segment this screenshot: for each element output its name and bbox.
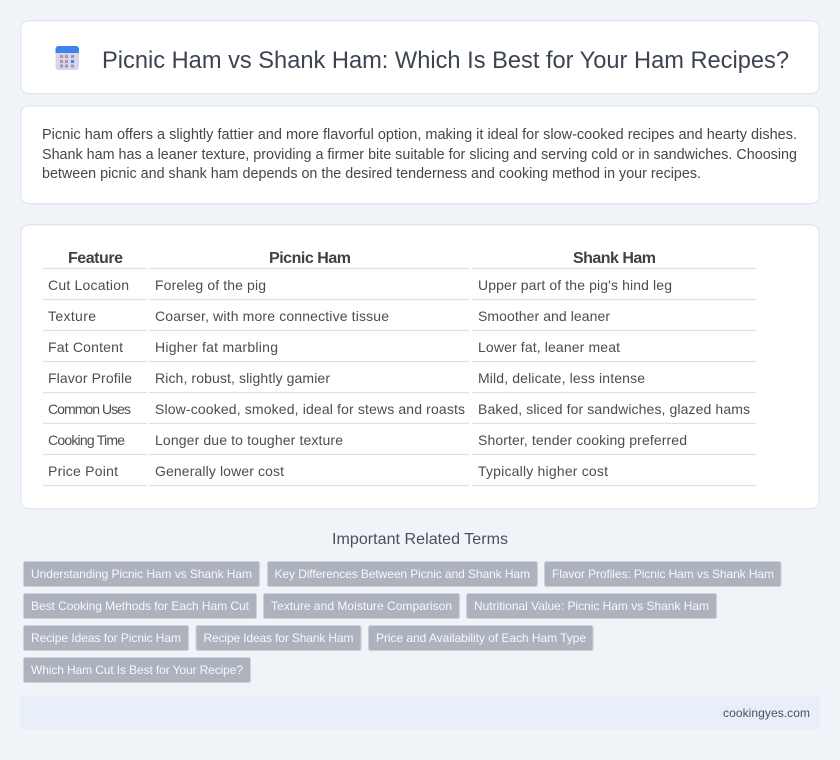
tag bbox=[24, 562, 260, 586]
text block: description: Shank ham has a leaner texture, providing a firmer bite suitable for slicing and serving cold or in sandwiches. Choosing bbox=[42, 147, 797, 163]
table header: Picnic Ham bbox=[269, 250, 351, 267]
row: price point bbox=[48, 463, 608, 479]
text block: description bbox=[42, 127, 797, 182]
table header: Feature bbox=[68, 250, 123, 267]
row: cooking time bbox=[48, 432, 687, 448]
row: cut location: Cut Location bbox=[48, 277, 129, 293]
text block: description: between picnic and shank ham depends on the desired tenderness and cooking method in your recipes. bbox=[42, 166, 701, 182]
tags: related terms bbox=[24, 562, 781, 682]
tag: Flavor Profiles: Picnic Ham vs Shank Ham bbox=[552, 567, 774, 581]
footer source: cookingyes.com bbox=[723, 706, 810, 720]
row: price point: Typically higher cost bbox=[478, 463, 608, 479]
text block: description: Picnic ham offers a slightly fattier and more flavorful option, making it ideal for slow-cooked recipes and hearty dishes. bbox=[42, 127, 797, 143]
tag: Which Ham Cut Is Best for Your Recipe? bbox=[31, 663, 243, 677]
tag: Recipe Ideas for Picnic Ham bbox=[31, 631, 181, 645]
row: fat content: Lower fat, leaner meat bbox=[478, 339, 620, 355]
row: fat content: Fat Content bbox=[48, 339, 123, 355]
tag bbox=[544, 562, 781, 586]
tag bbox=[368, 626, 593, 650]
row: cooking time: Cooking Time bbox=[48, 432, 125, 448]
row: price point: Generally lower cost bbox=[155, 463, 284, 479]
row: flavor profile bbox=[48, 370, 645, 386]
tag: Best Cooking Methods for Each Ham Cut bbox=[31, 599, 250, 613]
icon: calendar bbox=[56, 46, 79, 70]
heading: related terms: Important Related Terms bbox=[332, 531, 508, 548]
row: texture: Texture bbox=[48, 308, 96, 324]
tag bbox=[196, 626, 361, 650]
tag bbox=[466, 594, 716, 618]
tag bbox=[24, 594, 256, 618]
tag bbox=[24, 626, 188, 650]
tag: Texture and Moisture Comparison bbox=[271, 599, 452, 613]
row: price point: Price Point bbox=[48, 463, 118, 479]
row: common uses bbox=[48, 401, 750, 417]
row: flavor profile: Flavor Profile bbox=[48, 370, 132, 386]
row: common uses: Baked, sliced for sandwiches, glazed hams bbox=[478, 401, 750, 417]
table header: Shank Ham bbox=[573, 250, 656, 267]
title: Picnic Ham vs Shank Ham: Which Is Best for Your Ham Recipes? bbox=[102, 47, 789, 74]
tag: Nutritional Value: Picnic Ham vs Shank Ham bbox=[474, 599, 709, 613]
tag: Understanding Picnic Ham vs Shank Ham bbox=[31, 567, 252, 581]
panel: description bbox=[21, 106, 819, 204]
tag: Recipe Ideas for Shank Ham bbox=[204, 631, 354, 645]
tag: Price and Availability of Each Ham Type bbox=[376, 631, 586, 645]
tag: Key Differences Between Picnic and Shank Ham bbox=[274, 567, 530, 581]
footer bbox=[20, 696, 820, 730]
row: cut location bbox=[48, 277, 672, 293]
row: cut location: Upper part of the pig's hind leg bbox=[478, 277, 672, 293]
row: flavor profile: Rich, robust, slightly gamier bbox=[155, 370, 330, 386]
row: common uses: Common Uses bbox=[48, 401, 131, 417]
row: flavor profile: Mild, delicate, less intense bbox=[478, 370, 645, 386]
row: texture bbox=[48, 308, 610, 324]
row: cut location: Foreleg of the pig bbox=[155, 277, 266, 293]
row: texture: Smoother and leaner bbox=[478, 308, 610, 324]
tag bbox=[24, 658, 250, 682]
tag bbox=[264, 594, 460, 618]
panel: title header bbox=[21, 21, 819, 94]
row: cooking time: Longer due to tougher texture bbox=[155, 432, 343, 448]
row: cooking time: Shorter, tender cooking preferred bbox=[478, 432, 687, 448]
row: texture: Coarser, with more connective tissue bbox=[155, 308, 389, 324]
table header bbox=[68, 250, 656, 267]
row: fat content bbox=[48, 339, 620, 355]
tag bbox=[268, 562, 538, 586]
row: fat content: Higher fat marbling bbox=[155, 339, 278, 355]
row: common uses: Slow-cooked, smoked, ideal for stews and roasts bbox=[155, 401, 465, 417]
panel: comparison table bbox=[21, 225, 819, 509]
